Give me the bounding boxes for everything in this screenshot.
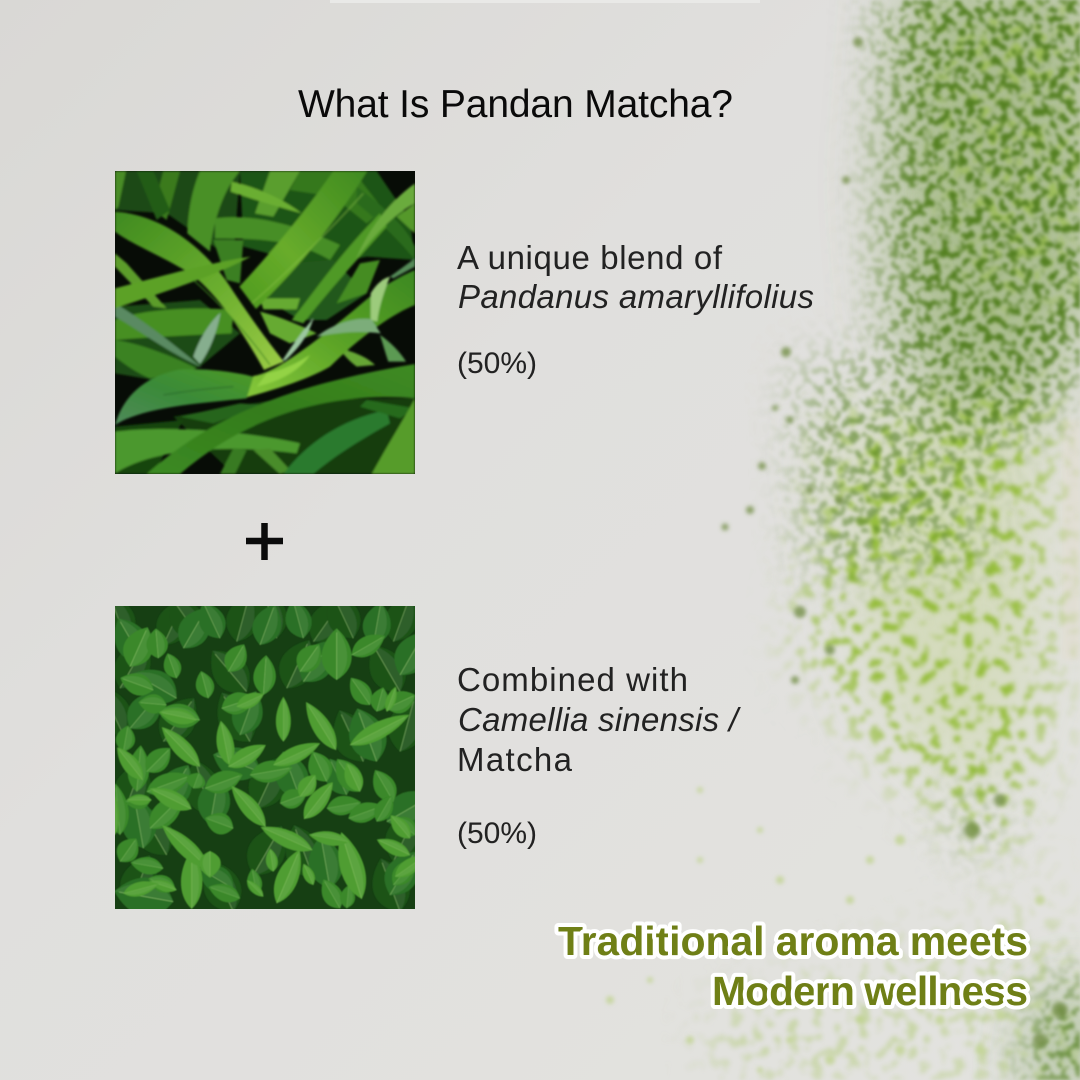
- text block: matcha: Combined with: [457, 661, 688, 698]
- plus sign: [246, 523, 283, 560]
- pale blades: [115, 303, 202, 367]
- tagline: [558, 918, 1028, 1014]
- front blades: [115, 212, 284, 370]
- text block: matcha: (50%): [457, 817, 537, 850]
- text block: pandan: (50%): [457, 347, 537, 380]
- text block: pandan: A unique blend of: [457, 239, 723, 276]
- back blades: [158, 171, 180, 221]
- background foliage: [115, 606, 415, 909]
- text block: pandan: [457, 239, 814, 380]
- photo: camellia tea leaves: [115, 606, 415, 909]
- photo: pandan leaves: [115, 171, 415, 474]
- text block: matcha: Matcha: [457, 741, 573, 778]
- text block: pandan: Pandanus amaryllifolius: [458, 278, 814, 315]
- tagline: Traditional aroma meets: [558, 918, 1028, 964]
- title: What Is Pandan Matcha?: [298, 83, 733, 126]
- bright foreground leaves: [105, 685, 429, 909]
- mid foliage: [105, 621, 422, 913]
- text block: matcha: [457, 661, 741, 850]
- dark filler blades: [115, 171, 241, 248]
- tagline: Modern wellness: [712, 968, 1028, 1014]
- text block: matcha: Camellia sinensis /: [458, 701, 741, 738]
- matcha powder cloud: [606, 0, 1080, 1080]
